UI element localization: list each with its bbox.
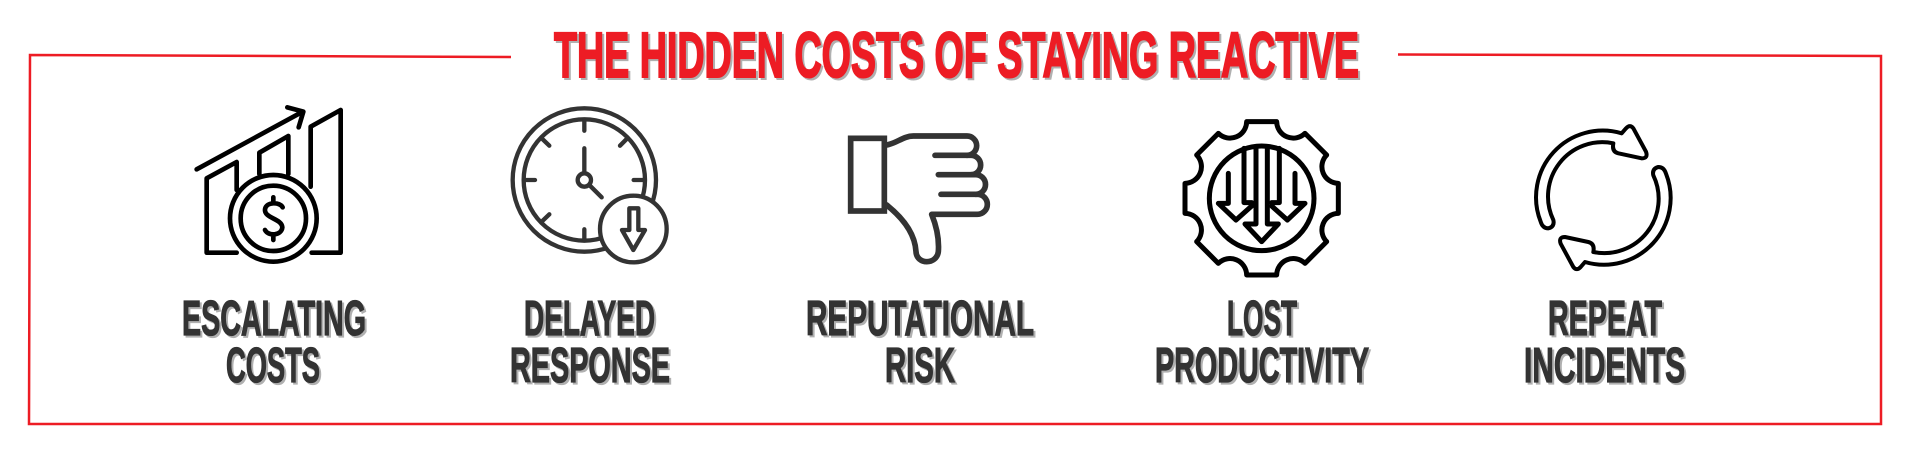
label: reputational risk: RISK xyxy=(885,339,955,393)
label: lost productivity xyxy=(1155,292,1369,393)
title: THE HIDDEN COSTS OF STAYING REACTIVE xyxy=(554,19,1359,91)
icon: gear with down arrows xyxy=(1185,122,1338,275)
item: lost productivity xyxy=(1155,122,1369,393)
label: escalating costs xyxy=(182,292,366,393)
label: delayed response: RESPONSE xyxy=(510,339,670,393)
item: escalating costs xyxy=(182,107,366,393)
label: reputational risk: REPUTATIONAL xyxy=(806,292,1034,346)
label: repeat incidents xyxy=(1524,292,1685,393)
item: repeat incidents xyxy=(1524,126,1685,393)
label: lost productivity: PRODUCTIVITY xyxy=(1155,339,1369,393)
icon: circular arrows xyxy=(1536,126,1671,269)
label: repeat incidents: INCIDENTS xyxy=(1524,339,1685,393)
panel: red frame xyxy=(29,54,1881,424)
icon: thumbs down xyxy=(851,136,987,262)
icon: bar chart with coin xyxy=(197,107,341,262)
item: reputational risk xyxy=(806,136,1034,393)
label: reputational risk xyxy=(806,292,1034,393)
icon: clock with down arrow xyxy=(513,108,667,262)
item: delayed response xyxy=(510,108,670,393)
label: lost productivity: LOST xyxy=(1227,292,1297,346)
label: escalating costs: COSTS xyxy=(226,339,320,393)
label: repeat incidents: REPEAT xyxy=(1548,292,1662,346)
label: delayed response: DELAYED xyxy=(524,292,655,346)
label: escalating costs: ESCALATING xyxy=(182,292,366,346)
label: delayed response xyxy=(510,292,670,393)
